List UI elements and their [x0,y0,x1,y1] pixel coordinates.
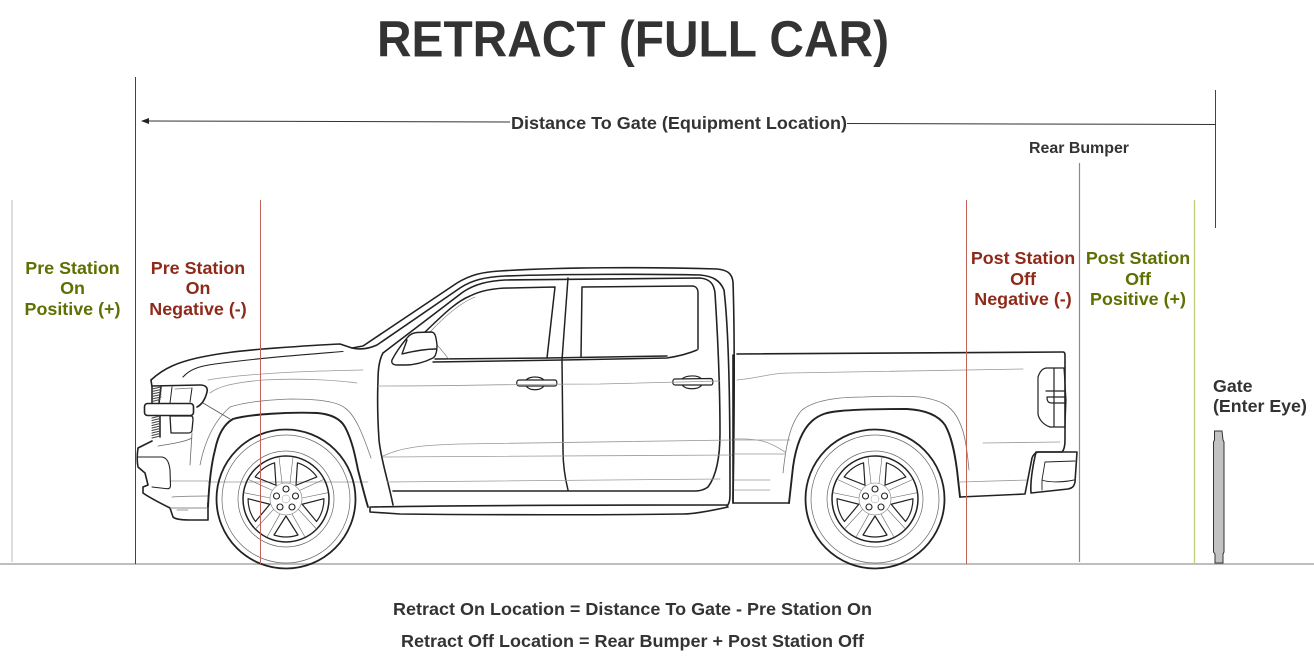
ground line [0,563,1314,565]
marker: post station off positive line [1194,200,1196,564]
label: pre station on negative: On [186,278,210,298]
label: pre station on negative: Pre Station [151,258,245,278]
rear bumper [1031,452,1077,493]
rocker panel [370,505,728,515]
label: distance to gate: Distance To Gate (Equipment Location) [511,113,847,133]
marker: rear bumper line [1078,163,1080,562]
truck bed [733,352,1065,503]
front bumper [137,441,208,520]
label: pre station on negative: Negative (-) [149,299,247,319]
B pillar door shut line [562,278,568,490]
label: pre station on positive: On [60,278,85,298]
formula: retract on location: Retract On Location = Distance To Gate - Pre Station On [393,599,872,619]
label: gate enter eye [1213,376,1307,416]
grille [152,387,161,438]
label: post station off positive [1086,248,1190,309]
label: pre station on positive: Pre Station [25,258,120,278]
formula: retract off location: Retract Off Location = Rear Bumper + Post Station Off [401,631,864,651]
label: pre station on positive [25,258,121,319]
label: post station off negative: Post Station [971,248,1075,268]
arrow: distance to gate [141,118,1216,124]
body character lines [170,369,1060,510]
truck body outline [151,268,789,515]
hood inner line [183,352,343,377]
label: post station off negative: Negative (-) [974,289,1072,309]
label: pre station on positive: Positive (+) [25,299,121,319]
front door edge [378,353,393,505]
marker: distance-to-gate start line [134,77,136,564]
marker: pre station on positive line [11,200,13,562]
front wheel [216,430,356,568]
windows [425,278,698,490]
label: post station off positive: Post Station [1086,248,1190,268]
truck illustration [137,268,1077,568]
rear wheel [806,430,944,568]
label: pre station on negative [149,258,247,319]
label: post station off negative [971,248,1075,309]
label: rear bumper: Rear Bumper [1029,140,1129,157]
icon: gate post [1214,431,1224,563]
marker: gate distance line [1214,90,1216,228]
front wheel arch [208,413,368,507]
headlights [144,380,207,437]
marker: post station off negative line [966,200,968,564]
label: gate enter eye: (Enter Eye) [1213,396,1307,416]
label: post station off negative: Off [1010,269,1036,289]
marker: pre station on negative line [260,200,262,564]
door handles [517,377,557,390]
label: gate enter eye: Gate [1213,376,1253,396]
tail light [1038,368,1066,427]
label: post station off positive: Off [1125,269,1151,289]
label: post station off positive: Positive (+) [1090,289,1186,309]
side mirror [392,332,437,365]
rear wheel arch [789,409,960,503]
title: RETRACT (FULL CAR) [377,10,889,68]
